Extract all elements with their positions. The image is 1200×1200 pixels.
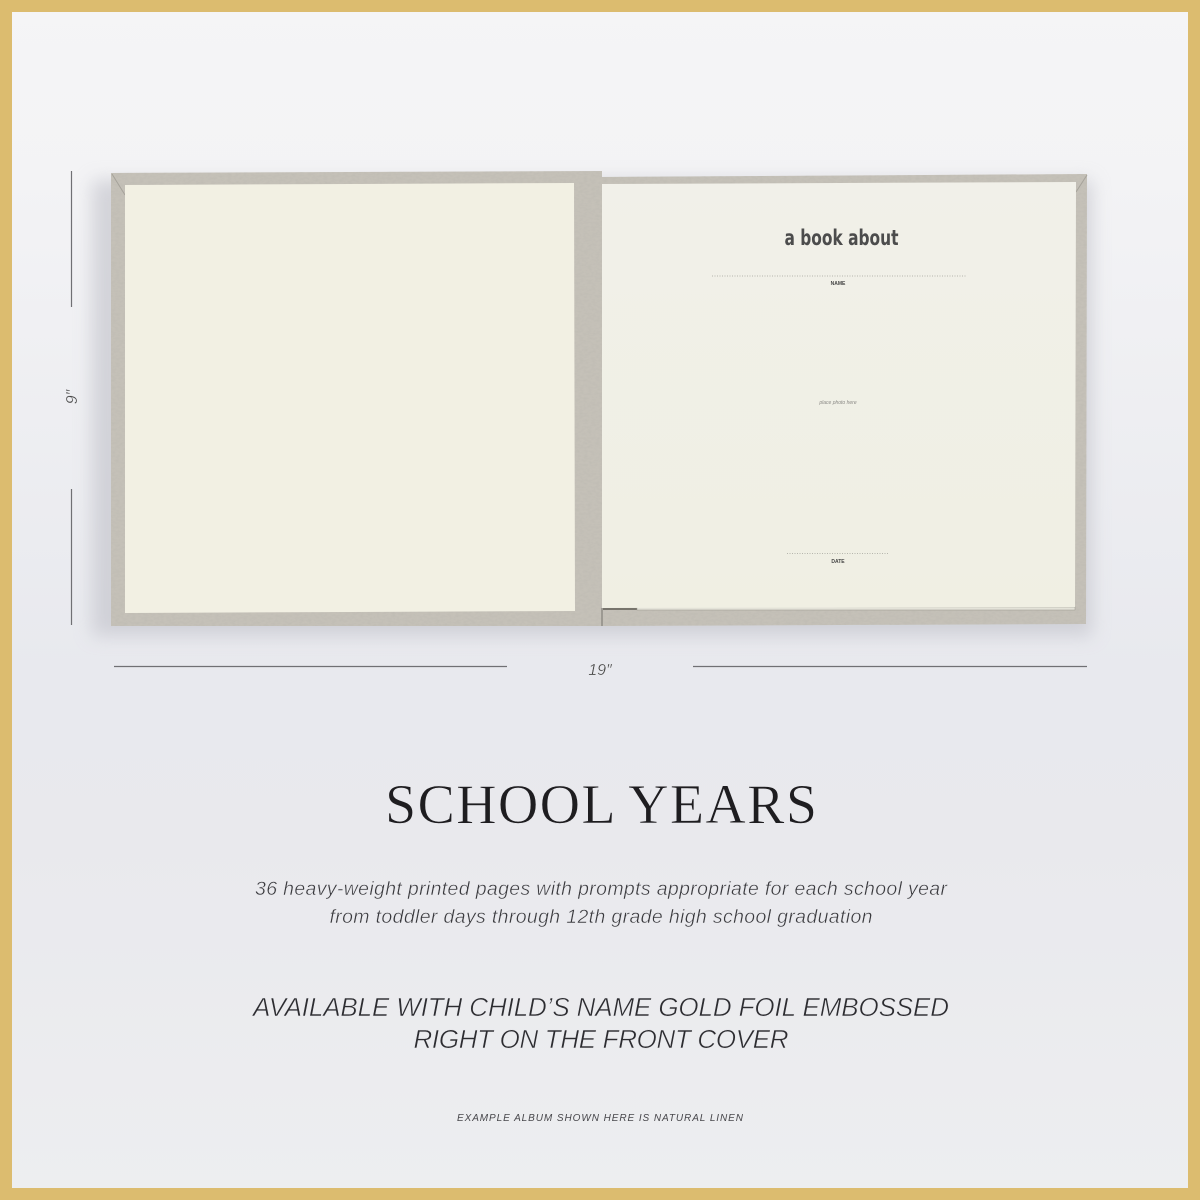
left width line (114, 666, 507, 668)
description: 36 heavy-weight printed pages with prompts appropriate for each school year (255, 878, 948, 900)
right cover corner fold (1076, 175, 1087, 192)
right width line (693, 666, 1087, 668)
height label: 9″ (64, 388, 81, 404)
date label: DATE (831, 559, 845, 565)
heading: SCHOOL YEARS (385, 774, 817, 836)
name label: NAME (831, 281, 846, 287)
left page (125, 183, 575, 613)
book title: a book about (784, 226, 898, 250)
description: from toddler days through 12th grade high school graduation (330, 906, 872, 928)
spine edge (601, 608, 603, 626)
description (255, 878, 948, 928)
inner cover shadow strip (603, 608, 637, 610)
left cover corner fold (112, 174, 125, 195)
open album (92, 171, 1092, 636)
lower height line (70, 489, 72, 625)
name dotted line (712, 275, 966, 277)
right cover (602, 174, 1087, 626)
photo placeholder: place photo here (818, 400, 857, 406)
footnote: EXAMPLE ALBUM SHOWN HERE IS NATURAL LINEN (457, 1113, 744, 1124)
upper height line (70, 171, 72, 307)
page stack edge (637, 607, 1075, 610)
album shadow (92, 180, 1092, 636)
date dotted line (787, 552, 889, 554)
width label: 19″ (588, 662, 613, 679)
gold foil note: RIGHT ON THE FRONT COVER (414, 1024, 788, 1054)
gold foil note: AVAILABLE WITH CHILD’S NAME GOLD FOIL EMBOSSED (251, 992, 949, 1022)
right page (602, 182, 1076, 608)
gold foil note (251, 992, 949, 1054)
left cover (111, 171, 602, 626)
